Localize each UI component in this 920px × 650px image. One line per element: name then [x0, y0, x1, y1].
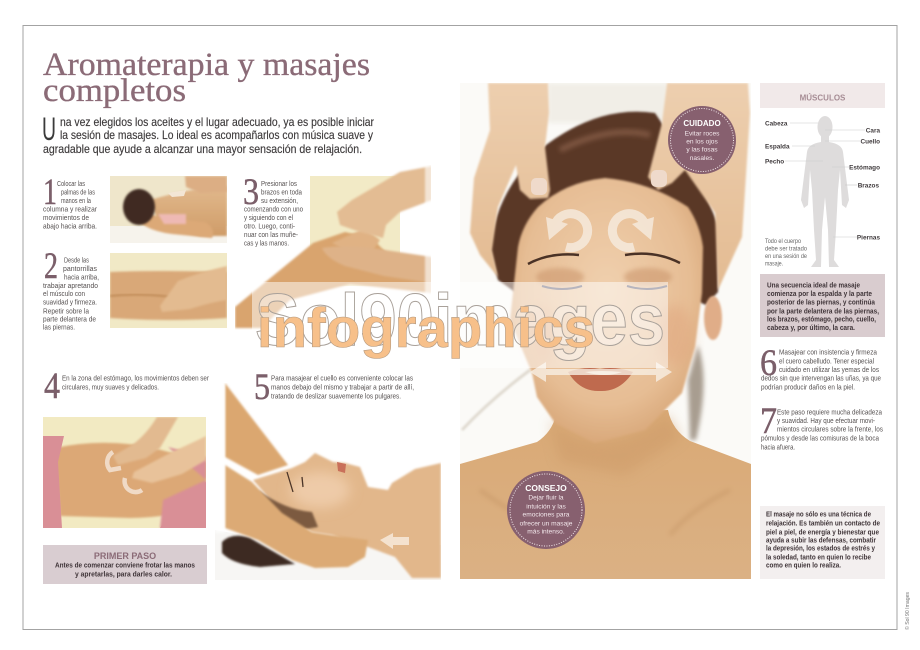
step 2 text: Desde las — [64, 258, 89, 264]
note: todo el cuerpo: masaje. — [765, 260, 783, 268]
callout: cuidado: nasales. — [690, 155, 714, 162]
callout: primer paso: Antes de comenzar conviene frotar las manos — [55, 560, 195, 570]
panel: secuencia ideal — [760, 274, 885, 337]
step 1 text: palmas de las — [61, 190, 95, 196]
callout: cuidado — [668, 106, 736, 174]
photo 5: neck massage — [215, 383, 441, 580]
panel: el masaje no sólo: piel a piel, de energía y bienestar que — [766, 528, 879, 536]
step 6 text: Masajear con insistencia y firmeza — [779, 350, 877, 356]
photo 3: arm and hands massage — [235, 165, 433, 328]
title: completos — [43, 73, 186, 109]
intro text: la sesión de masajes. Lo ideal es acompañarlos con música suave y — [60, 128, 373, 142]
step 2 text: Repetir sobre la — [43, 308, 89, 316]
photo 4: stomach massage — [43, 417, 206, 528]
body diagram with labels: Estómago — [849, 164, 880, 172]
step 2 text: suavidad y firmeza. — [43, 300, 97, 306]
title: Aromaterapia y masajes — [43, 47, 370, 83]
note: todo el cuerpo: debe ser tratado — [765, 246, 808, 252]
step 2 text: las piernas. — [43, 324, 75, 332]
step 3 text: 3 — [243, 172, 259, 213]
callout: primer paso: PRIMER PASO — [94, 551, 156, 561]
panel: el masaje no sólo: relajación. Es también un contacto de — [766, 518, 880, 528]
step 7 text: mientos circulares sobre la frente, los — [777, 426, 883, 434]
step 3 text: nuar con las muñe- — [244, 232, 299, 239]
callout: cuidado: CUIDADO — [683, 119, 721, 128]
step 4 text: En la zona del estómago, los movimientos deben ser — [62, 376, 210, 382]
panel: el masaje no sólo: la soledad, tanto en quien lo recibe — [766, 552, 871, 562]
step 1 text: Colocar las — [57, 181, 85, 188]
note: todo el cuerpo: en una sesión de — [765, 253, 807, 260]
hand right — [648, 83, 750, 290]
eyelashes — [542, 286, 582, 289]
step 2 text: trabajar apretando — [43, 283, 98, 290]
step 3 text: cas y las manos. — [244, 240, 289, 248]
face — [510, 178, 703, 443]
step 4 text — [44, 366, 210, 407]
step 2 text: el músculo con — [43, 291, 85, 298]
step 3 text: otro. Luego, conti- — [244, 224, 296, 230]
step 2 text: pantorrillas — [63, 266, 97, 273]
step 7 text: y suavidad. Hay que efectuar movi- — [777, 418, 876, 425]
body diagram with labels: Cuello — [860, 138, 880, 146]
step 2 text: hacia arriba, — [64, 274, 99, 282]
panel: el masaje no sólo: ayuda a subir las defensas, combatir — [766, 536, 876, 544]
body diagram with labels: Espalda — [765, 144, 790, 150]
step 5 text: 5 — [254, 367, 270, 408]
step 3 text: su extensión, — [261, 198, 298, 205]
step 1 text — [43, 172, 98, 230]
step 7 text: pómulos y desde las comisuras de la boca — [761, 436, 879, 442]
step 3 text: comenzando con uno — [244, 206, 303, 214]
callout: primer paso: y apretarlas, para darles calor. — [75, 570, 172, 578]
step 7 text: hacia afuera. — [761, 444, 795, 452]
step 7 text: Este paso requiere mucha delicadeza — [777, 410, 882, 416]
photo 1: back massage — [110, 176, 227, 243]
arrow: mouth double — [530, 362, 672, 382]
callout: consejo: CONSEJO — [525, 483, 567, 493]
panel: el masaje no sólo: como en quien lo realiza. — [766, 560, 841, 570]
step 6 text: dedos sin que intervengan las uñas, ya que — [761, 376, 881, 382]
step 1 text: columna y realizar — [43, 206, 98, 214]
body diagram with labels — [765, 116, 880, 267]
callout: consejo: intuición y las — [526, 504, 566, 510]
step 6 text: cuidado en utilizar las yemas de los — [779, 367, 879, 374]
step 5 text — [254, 367, 414, 408]
step 4 text: 4 — [44, 366, 60, 407]
panel: secuencia ideal: cabeza y, por último, la cara. — [767, 323, 855, 332]
step 5 text: Para masajear el cuello es conveniente colocar las — [271, 376, 413, 382]
arrow: forehead right circular — [612, 214, 654, 248]
step 4 text: circulares, muy suaves y delicados. — [62, 384, 159, 392]
arrow: forehead left circular — [546, 214, 588, 248]
step 2 text: parte delantera de — [43, 316, 96, 324]
intro text — [42, 111, 374, 156]
brows — [528, 254, 579, 264]
watermark: infographics — [257, 296, 595, 359]
panel: secuencia ideal: los brazos, estómago, pecho, cuello, — [767, 314, 876, 324]
ear — [704, 296, 722, 340]
hair — [490, 112, 718, 305]
panel: el masaje no sólo: El masaje no sólo es una técnica de — [766, 510, 871, 518]
photo 2: calf massage — [110, 253, 227, 328]
step 2 text: 2 — [44, 246, 58, 287]
step 3 text: Presionar los — [261, 181, 297, 188]
panel: secuencia ideal: posterior de las piernas, y continúa — [767, 298, 876, 306]
callout: consejo: ofrecer un masaje — [520, 520, 573, 528]
callout: primer paso — [43, 545, 207, 584]
body diagram with labels: Cara — [866, 128, 880, 134]
step 6 text: 6 — [760, 343, 777, 384]
panel: el masaje no sólo — [760, 506, 885, 579]
body silhouette — [801, 116, 849, 267]
step 7 text — [760, 401, 883, 452]
callout: cuidado: y las fosas — [686, 146, 718, 154]
panel: secuencia ideal: comienza por la espalda y la parte — [767, 289, 872, 298]
callout: cuidado: en los ojos — [686, 138, 718, 146]
intro text: na vez elegidos los aceites y el lugar adecuado, ya es posible iniciar — [60, 115, 374, 129]
step 6 text: el cuero cabelludo. Tener especial — [779, 358, 874, 366]
step 2 text — [43, 246, 99, 332]
body diagram with labels: Pecho — [765, 158, 784, 166]
callout: consejo: Dejar fluir la — [528, 494, 564, 502]
note: todo el cuerpo: Todo el cuerpo — [765, 238, 801, 245]
note: todo el cuerpo — [765, 238, 808, 268]
cheeks and eyelids — [536, 268, 584, 286]
panel: secuencia ideal: por la parte delantera de las piernas, — [767, 306, 879, 316]
body diagram with labels: Piernas — [857, 234, 880, 242]
step 5 text: manos debajo del mismo y trabajar a partir de allí, — [271, 384, 414, 392]
mouth — [568, 368, 633, 391]
panel: secuencia ideal: Una secuencia ideal de masaje — [767, 280, 860, 290]
intro text: agradable que ayude a alcanzar una mayor sensación de relajación. — [43, 142, 362, 156]
watermark: Sol90images — [255, 280, 665, 361]
step 3 text: y siguiendo con el — [244, 215, 293, 222]
main photo: face massage — [460, 83, 751, 579]
step 6 text — [760, 343, 881, 392]
callout: consejo: emociones para — [523, 512, 570, 518]
step 7 text: 7 — [760, 401, 777, 442]
step 1 text: manos en la — [61, 198, 91, 205]
callout: consejo: más intenso. — [527, 528, 565, 536]
heading: músculos — [760, 83, 885, 108]
step 5 text: tratando de deslizar suavemente los pulgares. — [271, 394, 401, 400]
shoulders and neck — [460, 410, 751, 579]
callout: cuidado: Evitar roces — [685, 130, 720, 138]
intro text: U — [42, 111, 56, 147]
step 6 text: podrían producir daños en la piel. — [761, 384, 855, 392]
heading: músculos: MÚSCULOS — [800, 94, 846, 102]
credit: © Sol 90 Images — [904, 591, 911, 630]
body diagram with labels: Brazos — [858, 182, 879, 190]
step 3 text — [243, 172, 303, 248]
step 3 text: brazos en toda — [261, 190, 302, 196]
panel: el masaje no sólo: la depresión, los estados de estrés y — [766, 544, 875, 552]
step 1 text: movimientos de — [43, 215, 89, 222]
hand left — [470, 83, 550, 277]
title — [43, 47, 370, 109]
body diagram with labels: Cabeza — [765, 120, 788, 128]
step 1 text: 1 — [43, 172, 57, 213]
callout: consejo — [507, 471, 585, 549]
step 1 text: abajo hacia arriba. — [43, 224, 97, 230]
